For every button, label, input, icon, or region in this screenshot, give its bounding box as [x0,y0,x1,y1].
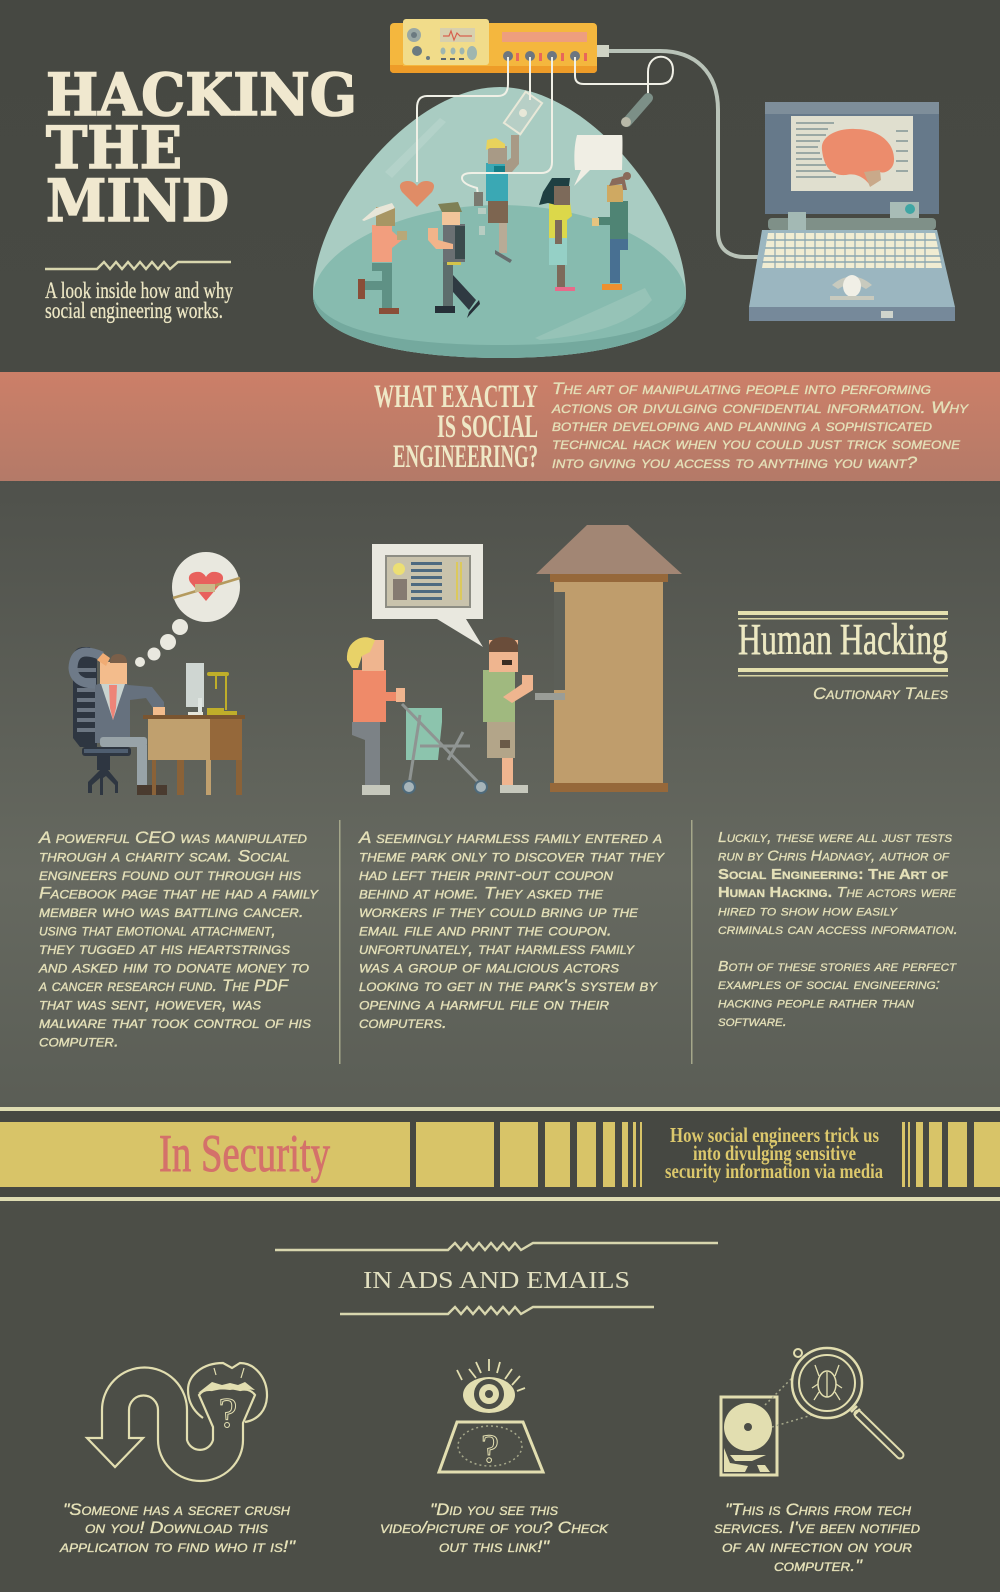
chair [73,647,131,795]
story column 1: member who was battling cancer. [39,902,304,921]
icon: eye and screen: ? [481,1426,499,1471]
story column 2: unfortunately, that harmless family [359,939,635,958]
quote 3: of an infection on your [722,1537,912,1556]
booth [535,525,682,792]
person: jumping man [462,135,519,263]
banner description: into divulging sensitive [693,1141,856,1165]
story column 3: software. [718,1013,787,1030]
story column 3: Social Engineering: The Art of [718,866,948,883]
heading: in ads and emails [275,1243,718,1314]
title: MIND [46,167,229,235]
quote 1: "Someone has a secret crush [63,1500,290,1519]
banner description: security information via media [665,1159,883,1183]
monitor [186,663,204,707]
story column 1: engineers found out through his [39,865,301,884]
person: woman in green [592,172,631,290]
quote 3: computer." [774,1556,863,1575]
story column 3: criminals can access information. [718,921,958,938]
quote 2: "Did you see this [430,1500,558,1519]
story column 1 [38,828,319,1050]
story column 1: computer. [39,1032,119,1050]
story column 2: A seemingly harmless family entered a [358,828,662,847]
stroller [402,704,487,793]
quote 2: out this link!" [439,1537,550,1556]
band paragraph [551,379,969,472]
band: what is social engineering [0,372,1000,481]
story column 2: had left their print-out coupon [359,865,613,884]
story column 3 [718,829,958,1030]
trackball [830,275,874,300]
desk [143,715,245,719]
desk lamp [207,672,237,715]
band paragraph: The art of manipulating people into performing [552,379,931,398]
illustration: family and booth [347,525,682,795]
divider 1 [339,820,340,1064]
banner title: In Security [159,1125,330,1183]
laptop screen [765,102,939,214]
thought bubble [135,552,240,667]
story column 3: Human Hacking. The actors were [718,884,957,901]
heading: in ads and emails: IN ADS AND EMAILS [363,1268,630,1294]
story column 1: A powerful CEO was manipulated [38,828,307,847]
band heading: WHAT EXACTLY [374,379,538,415]
illustration: dome with people [313,87,686,358]
banknote [504,92,542,134]
band heading: ENGINEERING? [393,439,538,475]
story column 2 [358,828,665,1032]
subtitle: social engineering works. [45,298,223,323]
laptop base [749,230,955,307]
person: man in vest [428,202,480,318]
story column 1: they tugged at his heartstrings [39,939,290,958]
story column 3: hired to show how easily [718,902,898,920]
story column 3: Luckily, these were all just tests [718,829,953,846]
person: grey haired woman [358,203,407,314]
webcam [890,202,919,228]
banner description: How social engineers trick us [670,1123,879,1147]
band paragraph: actions or divulging confidential information. Why [551,398,969,417]
barcode bars [0,1122,1000,1187]
band heading [374,379,538,475]
icon: disk and magnifier [721,1348,900,1475]
story column 1: using that emotional attachment, [39,920,276,940]
title: THE [46,114,182,182]
story column 2: looking to get in the park's system by [359,976,658,995]
brain [822,129,894,185]
band heading: IS SOCIAL [437,409,538,445]
section banner: In Security [0,1107,1000,1201]
CEO figure [73,652,102,684]
icon: eye and screen [439,1359,543,1472]
heading: Human Hacking [738,611,948,703]
subtitle [45,278,233,323]
quote 3 [714,1500,920,1575]
hinge [768,218,936,230]
quote 1: application to find who it is!" [59,1537,296,1556]
microphone [621,98,648,127]
quote 1: on you! Download this [85,1518,268,1537]
divider 2 [691,820,692,1064]
story column 3: run by Chris Hadnagy, author of [718,848,950,864]
band paragraph: bother developing and planning a sophisticated [552,416,932,435]
squiggle divider [45,262,231,269]
speech bubble with coupon [372,544,483,647]
quote 3: "This is Chris from tech [725,1500,911,1519]
illustration: CEO at desk [73,552,245,795]
story column 2: email file and print the coupon. [359,920,612,940]
story column 2: behind at home. They asked the [359,884,604,902]
story column 1: and asked him to donate money to [38,958,309,976]
story column 2: was a group of malicious actors [359,958,619,976]
person: woman in yellow [539,178,575,291]
dome floor [313,205,686,358]
story column 1: malware that took control of his [39,1013,311,1032]
title [46,61,357,235]
device: hacking box [390,19,609,73]
keyboard [762,233,942,268]
story column 2: computers. [359,1013,447,1032]
title: HACKING [46,61,357,129]
story column 2: theme park only to discover that they [359,846,665,866]
story column 1: a cancer research fund. The PDF [38,976,290,995]
quote 3: services. I've been notified [714,1518,920,1537]
story column 1: Facebook page that he had a family [39,884,319,902]
icon: arrow and tongue: ? [219,1391,237,1437]
story column 1: through a charity scam. Social [39,846,290,866]
quote 2: video/picture of you? Check [380,1518,609,1537]
icon: arrow and tongue [87,1363,267,1481]
blonde woman [347,637,405,795]
heading: Human Hacking: Cautionary Tales [813,684,948,703]
quote 1 [59,1500,296,1556]
band paragraph: into giving you access to anything you want? [552,453,918,472]
story column 3: hacking people rather than [718,994,914,1012]
speech bubble [574,135,622,186]
cables [417,51,766,257]
moustached man [483,637,533,793]
dome glass [313,87,686,358]
story column 3: Both of these stories are perfect [718,958,957,975]
band paragraph: technical hack when you could just trick someone [552,434,961,453]
banner description [665,1123,883,1183]
heart [400,181,434,207]
illustration: laptop [749,102,955,321]
story column 2: opening a harmful file on their [359,994,609,1014]
subtitle: A look inside how and why [45,278,233,303]
story column 3: examples of social engineering: [718,976,940,993]
quote 2 [380,1500,609,1556]
story column 2: workers if they could bring up the [359,902,639,921]
story column 1: that was sent, however, was [39,994,261,1014]
